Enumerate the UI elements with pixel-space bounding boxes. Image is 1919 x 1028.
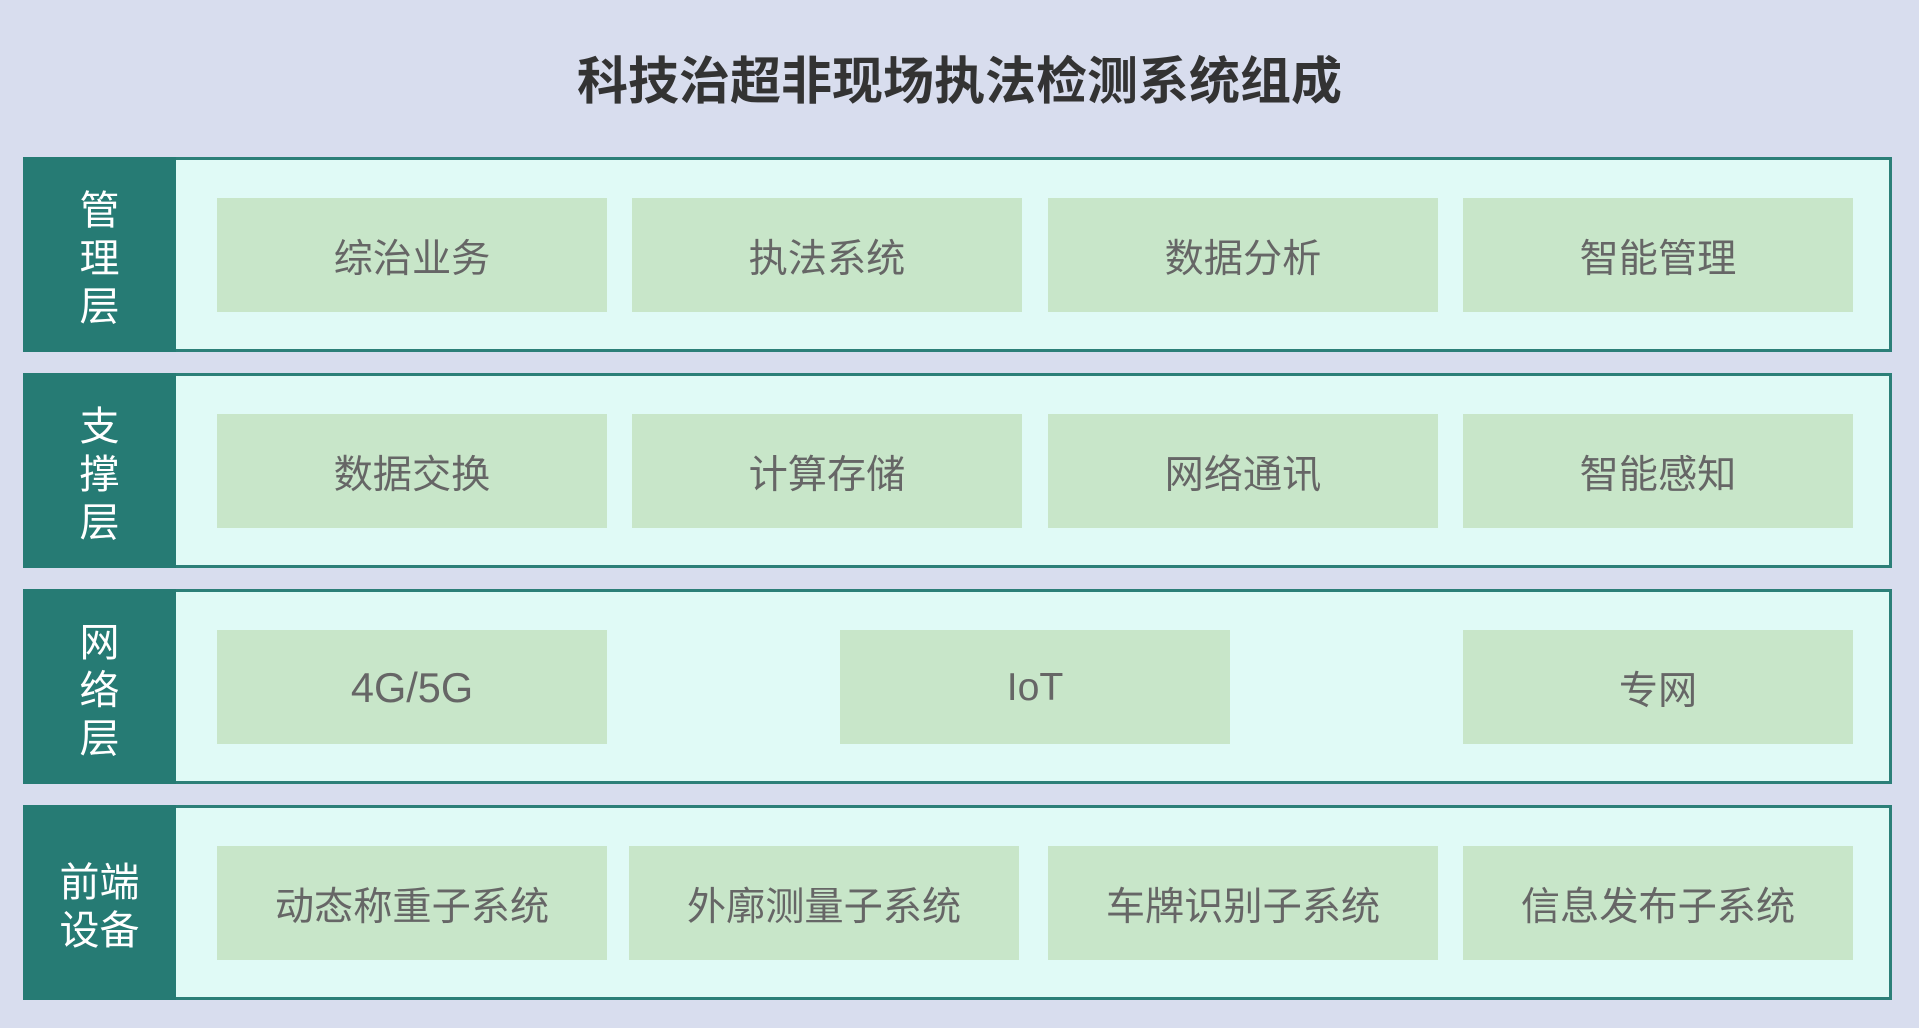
item: plate recognition subsystem: 车牌识别子系统	[1106, 886, 1380, 929]
item: IoT	[840, 630, 1230, 744]
item: 4G/5G	[217, 630, 607, 744]
layer label: support: 支	[80, 405, 120, 449]
layer label: front-end devices	[23, 805, 176, 1000]
item: IoT: IoT	[1007, 666, 1063, 709]
layer label: front-end devices: 前端	[60, 861, 140, 905]
item: intelligent management: 智能管理	[1580, 238, 1736, 281]
item: plate recognition subsystem	[1048, 846, 1438, 960]
item: compute and storage: 计算存储	[749, 454, 905, 497]
item: profile measurement subsystem	[629, 846, 1019, 960]
layer label: support	[23, 373, 176, 568]
layer label: network: 网	[80, 621, 120, 665]
layer label: network	[23, 589, 176, 784]
item: data exchange	[217, 414, 607, 528]
item: private network: 专网	[1619, 670, 1697, 713]
panel: management layer	[23, 157, 1892, 352]
layer label: front-end devices: 设备	[60, 909, 140, 953]
panel: front-end devices	[23, 805, 1892, 1000]
item: data exchange: 数据交换	[334, 454, 490, 497]
item: network communication: 网络通讯	[1165, 454, 1321, 497]
layer label: network: 络	[80, 669, 120, 713]
item: intelligent sensing	[1463, 414, 1853, 528]
layer label: management: 管	[80, 189, 120, 233]
panel: support layer	[23, 373, 1892, 568]
item: enforcement system	[632, 198, 1022, 312]
layer label: management	[23, 157, 176, 352]
panel: network layer	[23, 589, 1892, 784]
item: integrated business	[217, 198, 607, 312]
item: 4G/5G: 4G/5G	[351, 664, 473, 711]
title: 科技治超非现场执法检测系统组成	[577, 53, 1342, 110]
item: network communication	[1048, 414, 1438, 528]
item: integrated business: 综治业务	[334, 238, 490, 281]
item: compute and storage	[632, 414, 1022, 528]
layer label: support: 撑	[80, 453, 120, 497]
item: profile measurement subsystem: 外廓测量子系统	[687, 886, 961, 929]
layer label: support: 层	[80, 501, 120, 545]
layer label: network: 层	[80, 717, 120, 761]
item: dynamic weighing subsystem: 动态称重子系统	[275, 886, 549, 929]
item: information publishing subsystem: 信息发布子系统	[1521, 886, 1795, 929]
item: data analysis	[1048, 198, 1438, 312]
item: data analysis: 数据分析	[1165, 238, 1321, 281]
item: private network	[1463, 630, 1853, 744]
item: intelligent management	[1463, 198, 1853, 312]
item: intelligent sensing: 智能感知	[1580, 454, 1736, 497]
layer label: management: 层	[80, 285, 120, 329]
item: enforcement system: 执法系统	[749, 238, 905, 281]
item: information publishing subsystem	[1463, 846, 1853, 960]
item: dynamic weighing subsystem	[217, 846, 607, 960]
layer label: management: 理	[80, 237, 120, 281]
